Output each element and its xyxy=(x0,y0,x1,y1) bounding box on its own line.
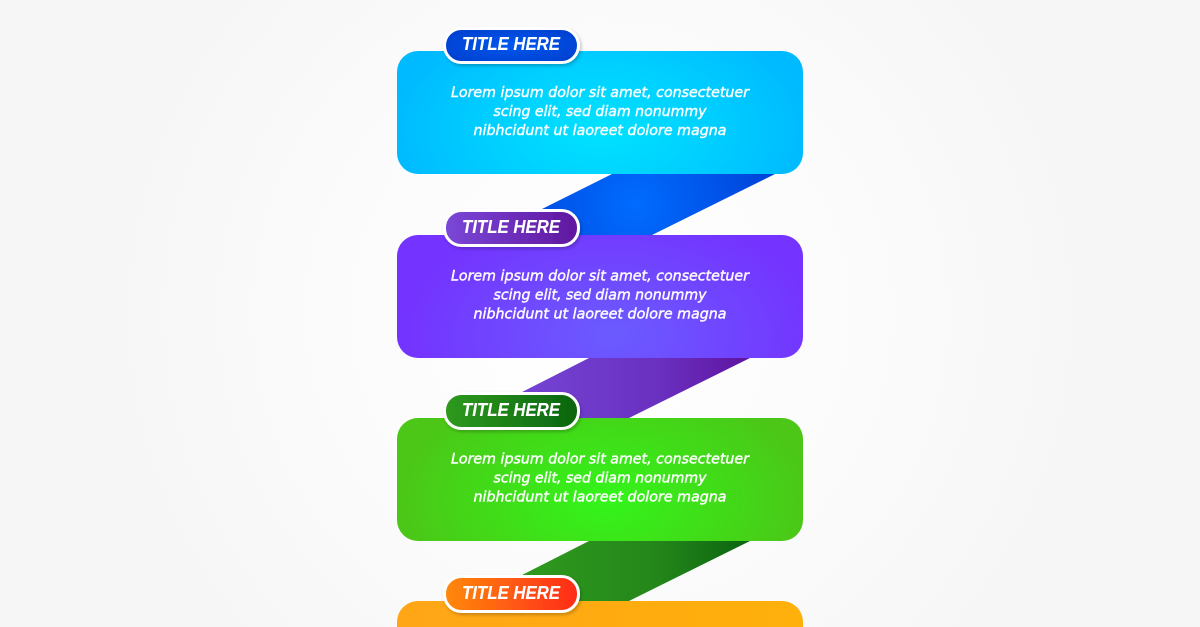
step 1 text xyxy=(451,85,750,139)
step 2 text: Lorem ipsum dolor sit amet, consectetuer xyxy=(451,268,750,284)
connector ribbon: blue xyxy=(490,174,775,235)
title pill 3 xyxy=(444,394,578,428)
title pill 2 xyxy=(444,210,578,246)
step 3 text: scing elit, sed diam nonummy xyxy=(494,470,707,486)
step 1 text: scing elit, sed diam nonummy xyxy=(494,104,707,120)
connector ribbon: green xyxy=(471,541,750,601)
step 1 text: Lorem ipsum dolor sit amet, consectetuer xyxy=(451,85,750,101)
step 1 text: nibhcidunt ut laoreet dolore magna xyxy=(474,123,726,139)
panel: step 2 xyxy=(397,235,803,358)
panel: step 1 xyxy=(397,51,803,174)
title pill 3: TITLE HERE xyxy=(462,399,561,420)
title pill 4 xyxy=(444,576,578,612)
title pill 1: TITLE HERE xyxy=(462,33,561,54)
step 3 text: nibhcidunt ut laoreet dolore magna xyxy=(474,490,726,506)
title pill 2: TITLE HERE xyxy=(462,216,561,237)
panel: step 3 xyxy=(397,418,803,541)
panel: step 4 xyxy=(397,601,803,627)
step 2 text: nibhcidunt ut laoreet dolore magna xyxy=(474,306,726,322)
step 2 text: scing elit, sed diam nonummy xyxy=(494,288,707,304)
title pill 1 xyxy=(444,28,578,62)
connector ribbon: purple xyxy=(471,358,750,418)
step 3 text: Lorem ipsum dolor sit amet, consectetuer xyxy=(451,452,750,468)
step 2 text xyxy=(451,268,750,322)
step 3 text xyxy=(451,452,750,506)
title pill 4: TITLE HERE xyxy=(462,582,561,603)
